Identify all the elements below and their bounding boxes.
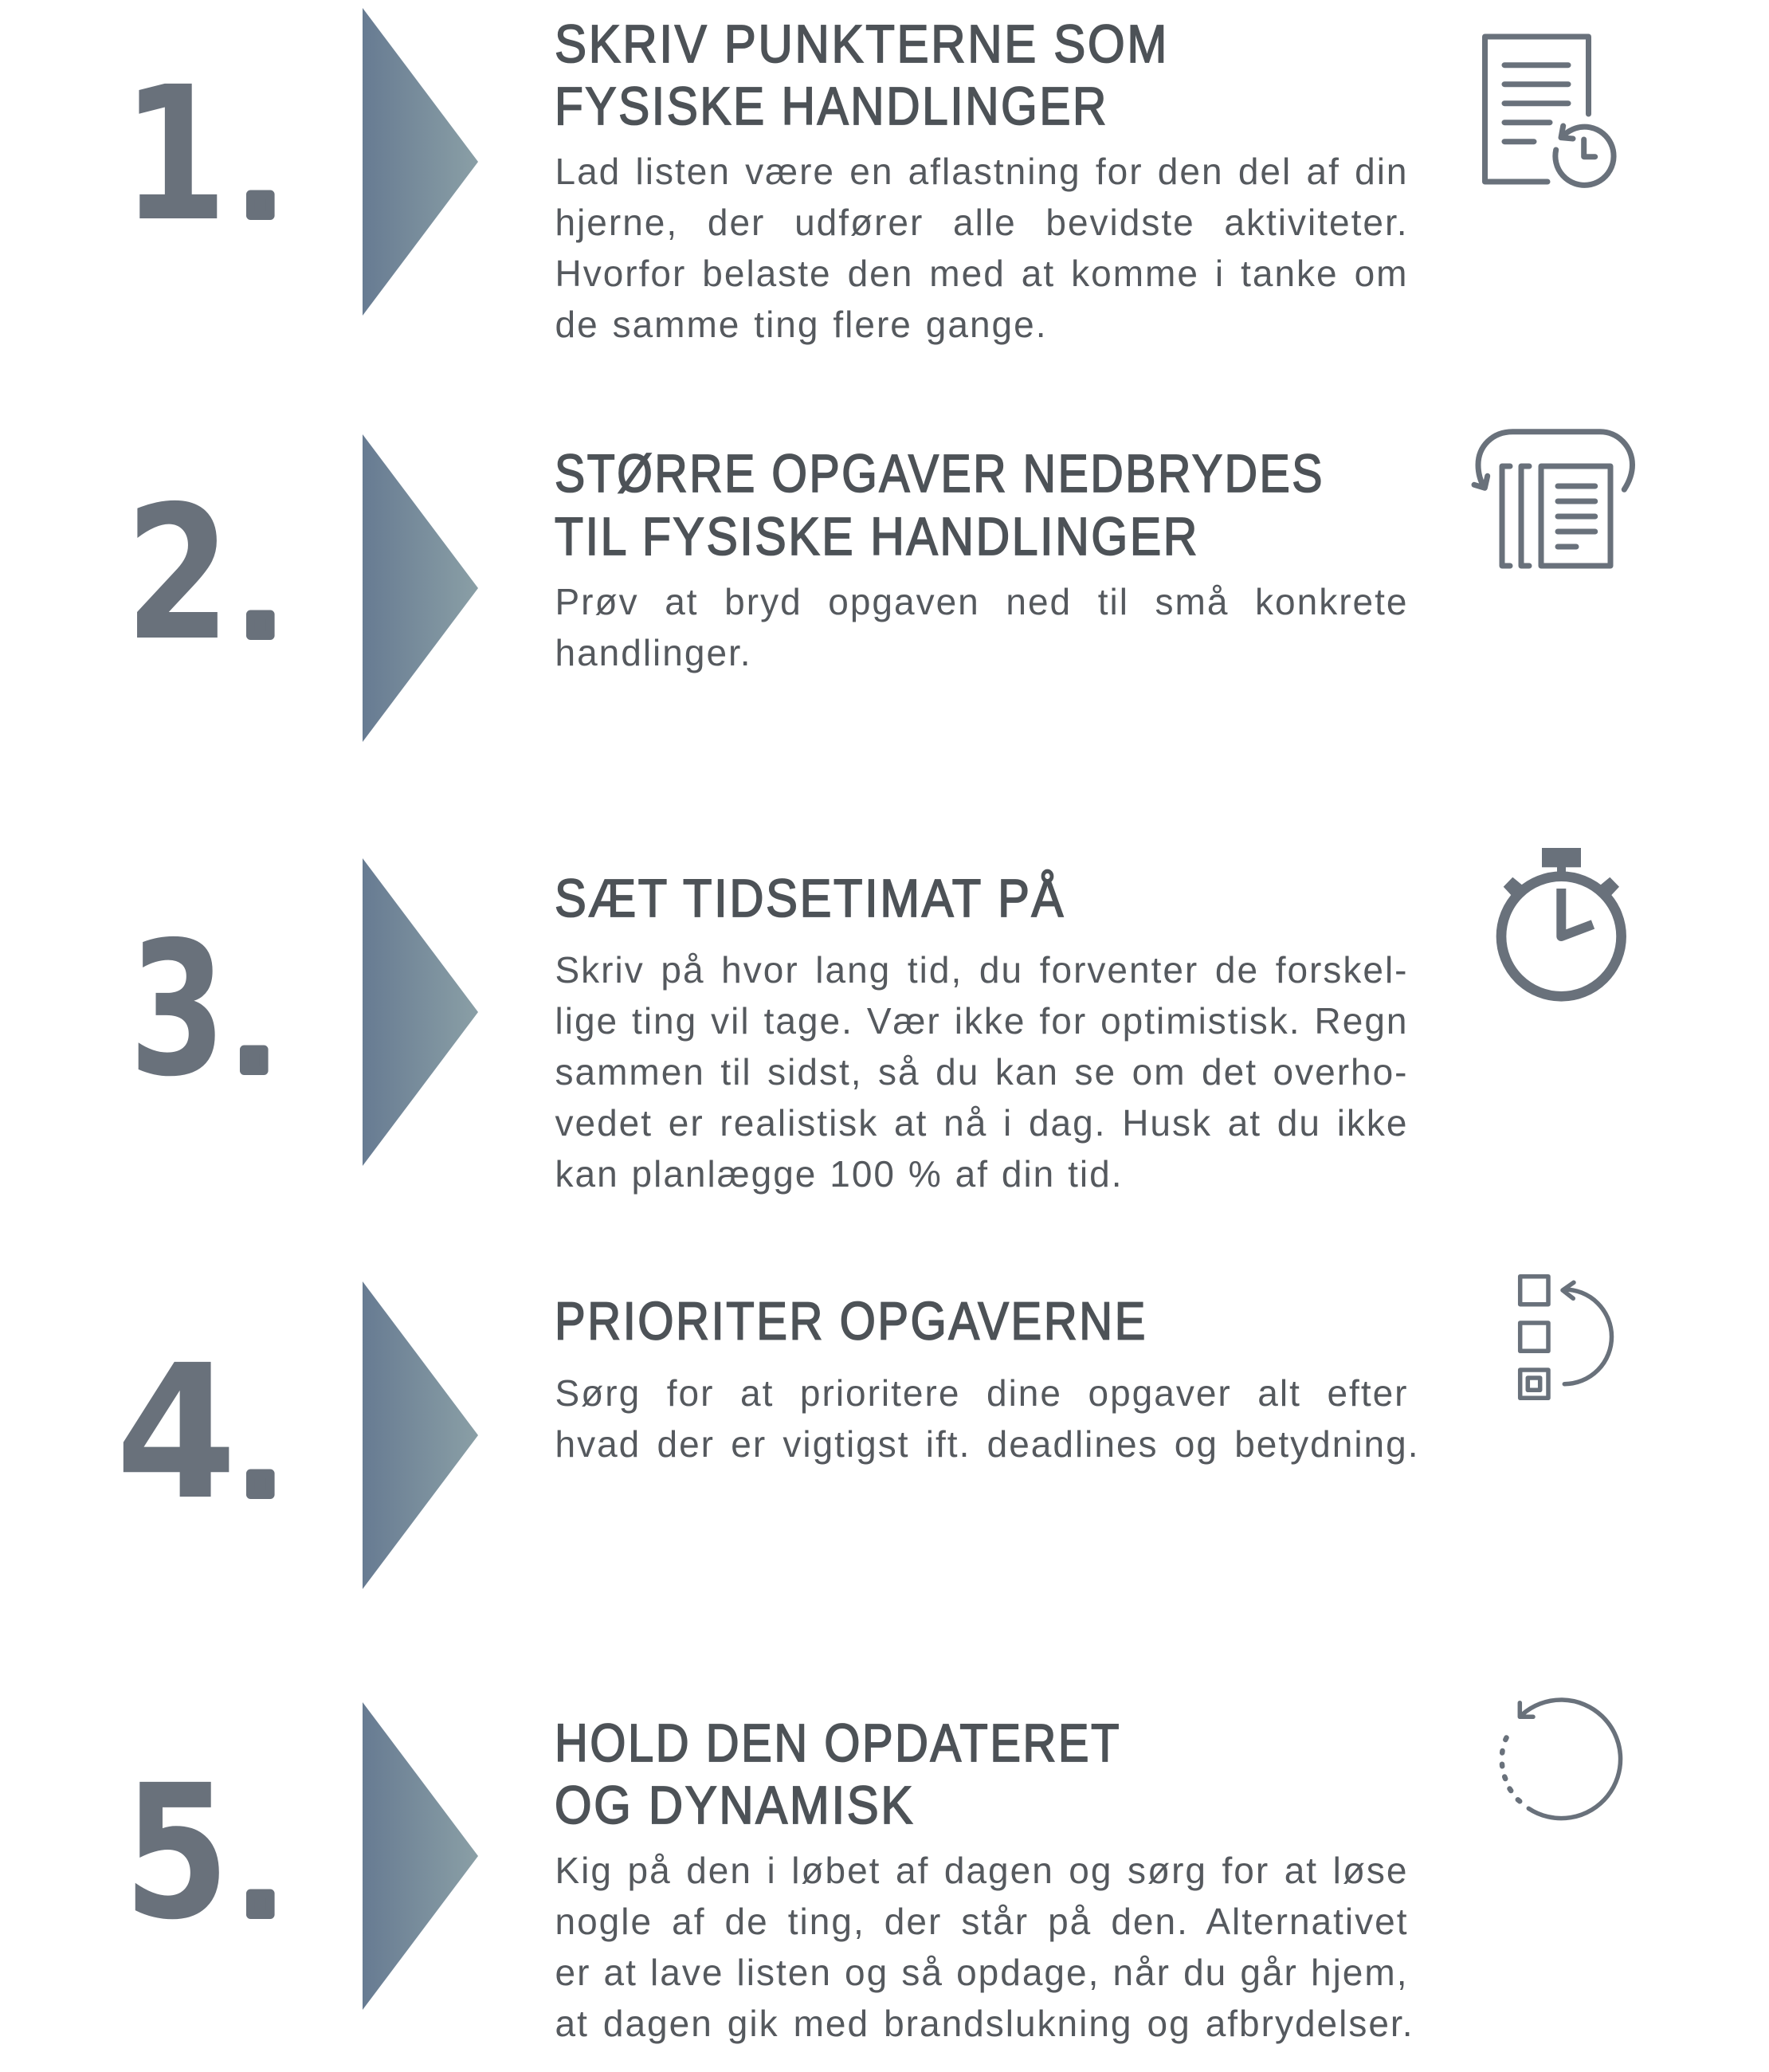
icon: stopwatch — [1501, 848, 1622, 996]
body text 3: kan planlægge 100 % af din tid. — [555, 1153, 1124, 1195]
panel: step 4 — [116, 1274, 1614, 1589]
heading 2: TIL FYSISKE HANDLINGER — [555, 507, 1199, 567]
body text 2 — [555, 581, 1409, 673]
step number 2: . — [239, 532, 281, 663]
body text 1: Hvorfor belaste den med at komme i tanke om — [555, 253, 1409, 294]
body text 5: er at lave listen og så opdage, når du går hjem, — [555, 1952, 1409, 1993]
body text 1: de samme ting flere gange. — [555, 304, 1047, 345]
panel: step 3 — [129, 848, 1626, 1195]
arrow triangle 3 — [363, 858, 478, 1166]
icon: document stack with arrow — [1474, 432, 1632, 566]
icon: checklist with arrow — [1520, 1277, 1612, 1398]
body text 3: sammen til sidst, så du kan se om det overho- — [555, 1051, 1409, 1093]
arrow triangle 5 — [363, 1702, 478, 2010]
heading 1 — [555, 14, 1169, 136]
step number 4: . — [239, 1391, 281, 1522]
arrow triangle 2 — [363, 434, 478, 742]
heading 5 — [555, 1713, 1121, 1835]
step number 1: 1 — [122, 48, 227, 263]
body text 3: Skriv på hvor lang tid, du forventer de forskel- — [555, 949, 1409, 991]
step number 2: 2 — [125, 467, 230, 682]
step number 3 — [129, 902, 275, 1117]
body text 4 — [555, 1372, 1420, 1465]
body text 5: at dagen gik med brandslukning og afbrydelser. — [555, 2003, 1414, 2044]
heading 3: SÆT TIDSETIMAT PÅ — [555, 869, 1065, 928]
panel: step 2 — [125, 429, 1635, 742]
arrow triangle 4 — [363, 1281, 478, 1589]
body text 2: Prøv at bryd opgaven ned til små konkrete — [555, 581, 1409, 622]
heading 4: PRIORITER OPGAVERNE — [555, 1291, 1147, 1352]
body text 2: handlinger. — [555, 632, 752, 673]
step number 5: 5 — [124, 1746, 229, 1961]
body text 5: Kig på den i løbet af dagen og sørg for at løse — [555, 1850, 1409, 1891]
step number 1 — [122, 48, 281, 263]
body text 3: lige ting vil tage. Vær ikke for optimistisk. Regn — [555, 1000, 1409, 1042]
body text 5 — [555, 1850, 1414, 2044]
panel: step 5 — [124, 1697, 1622, 2044]
body text 4: hvad der er vigtigst ift. deadlines og betydning. — [555, 1423, 1420, 1465]
body text 1 — [555, 151, 1409, 345]
step number 4: 4 — [116, 1326, 237, 1541]
panel: step 1 — [122, 8, 1617, 345]
icon: document with clock — [1485, 37, 1614, 185]
body text 3 — [555, 949, 1409, 1195]
heading 1: SKRIV PUNKTERNE SOM — [555, 14, 1169, 74]
body text 4: Sørg for at prioritere dine opgaver alt efter — [555, 1372, 1409, 1414]
heading 2: STØRRE OPGAVER NEDBRYDES — [555, 444, 1324, 504]
icon: circular refresh arrow — [1502, 1700, 1621, 1819]
body text 3: vedet er realistisk at nå i dag. Husk at du ikke — [555, 1102, 1409, 1144]
heading 5: HOLD DEN OPDATERET — [555, 1713, 1121, 1773]
heading 2 — [555, 444, 1324, 567]
body text 1: Lad listen være en aflastning for den del af din — [555, 151, 1409, 192]
body text 1: hjerne, der udfører alle bevidste aktiviteter. — [555, 202, 1409, 243]
heading 1: FYSISKE HANDLINGER — [555, 77, 1108, 136]
step number 2 — [125, 467, 281, 682]
body text 5: nogle af de ting, der står på den. Alternativet — [555, 1901, 1409, 1942]
step number 5: . — [239, 1812, 281, 1941]
step number 5 — [124, 1746, 281, 1961]
heading 5: OG DYNAMISK — [555, 1776, 915, 1835]
step number 3: 3 — [129, 902, 226, 1117]
step number 1: . — [239, 113, 281, 242]
step number 3: . — [233, 967, 275, 1098]
arrow triangle 1 — [363, 8, 478, 316]
